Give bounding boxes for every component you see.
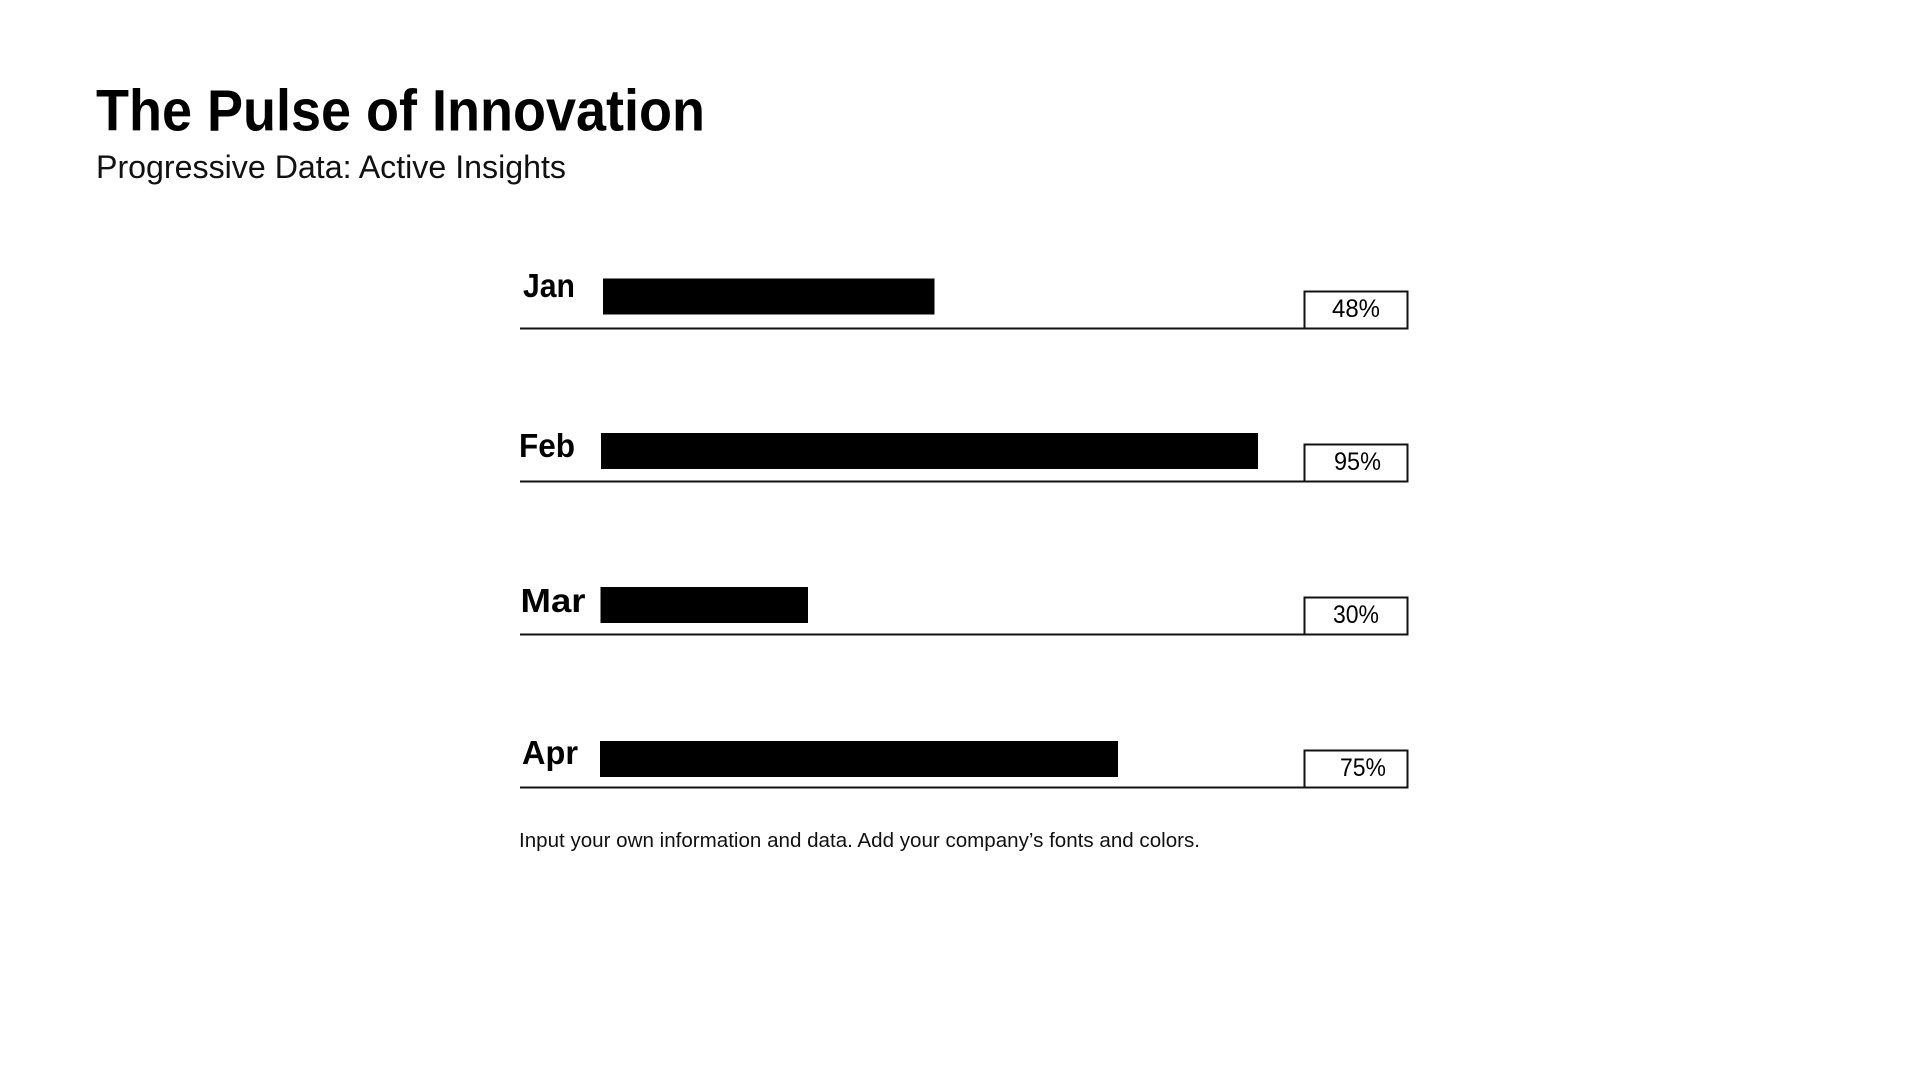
row: January [520, 267, 1408, 330]
month label: March: Mar [520, 582, 586, 619]
value box: January [1304, 292, 1408, 328]
value box: February: 95% [1334, 448, 1381, 476]
baseline: April [520, 786, 1305, 788]
row: February [519, 427, 1408, 482]
value box: March: 30% [1333, 601, 1379, 629]
bar: January 48% [603, 278, 934, 314]
bar: March 30% [600, 587, 808, 623]
value box: January: 48% [1332, 295, 1380, 323]
value box: March [1304, 598, 1408, 634]
title: The Pulse of Innovation [96, 78, 705, 144]
value box: April: 75% [1340, 754, 1386, 782]
bar: February 95% [601, 433, 1258, 469]
subtitle: Progressive Data: Active Insights [96, 149, 566, 185]
bar chart [519, 267, 1408, 788]
row: April [520, 734, 1408, 788]
month label: February: Feb [519, 427, 575, 464]
baseline: January [520, 328, 1305, 330]
baseline: March [520, 634, 1305, 636]
value box: February [1304, 444, 1408, 482]
value box: April [1304, 750, 1408, 788]
bar: April 75% [600, 741, 1118, 777]
row: March [520, 582, 1408, 636]
baseline: February [520, 480, 1305, 482]
month label: January: Jan [523, 267, 575, 304]
month label: April: Apr [522, 734, 578, 771]
footnote: Input your own information and data. Add your company’s fonts and colors. [519, 830, 1200, 852]
